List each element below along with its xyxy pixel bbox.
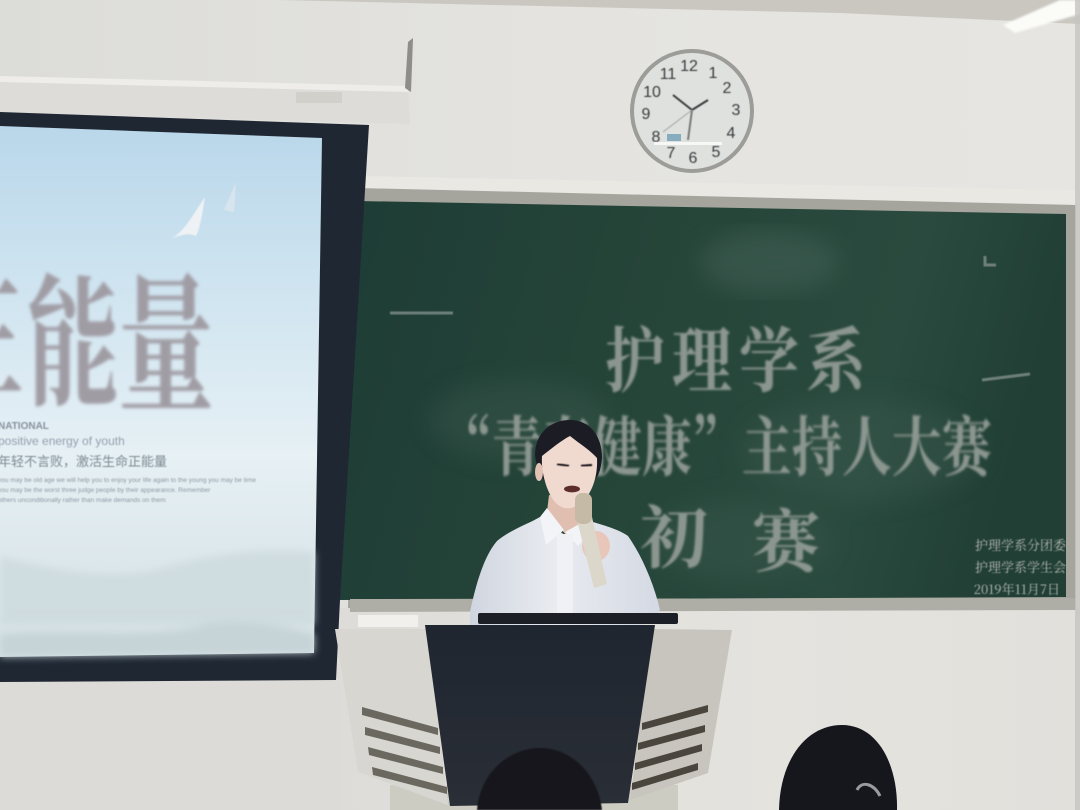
projector screen housing (0, 38, 413, 124)
clock numerals: 5 (712, 144, 721, 161)
neck (547, 495, 586, 535)
chalk signature: 护理学系分团委 (975, 535, 1066, 554)
chalkboard (338, 188, 1076, 612)
chalk signature: 2019年11月7日 (974, 579, 1060, 598)
chalk title line 3: 初 (640, 485, 708, 582)
eyes (557, 464, 592, 466)
podium base (390, 785, 678, 810)
clock numerals: 3 (732, 102, 741, 119)
chalk smudges (430, 380, 980, 580)
wall clock (630, 49, 754, 173)
slide text lines: you may be the worst three judge people by their appearance. Remember (0, 487, 211, 494)
lower wall (320, 608, 1080, 810)
placket (557, 534, 573, 616)
chalk title line 1: 护理学系 (605, 304, 873, 406)
board frame (348, 188, 1076, 610)
podium right wing (630, 629, 732, 800)
chalk title line 2: “青春健康”主持人大赛 (442, 395, 995, 489)
podium (335, 613, 732, 810)
hair clip (857, 784, 880, 796)
podium screen (425, 625, 655, 806)
chalk tray (350, 598, 1076, 612)
microphone (575, 493, 607, 588)
birds (172, 182, 236, 238)
board surface (338, 201, 1066, 600)
clock numerals: 7 (667, 145, 676, 162)
clock rim (630, 49, 754, 173)
chalk signature (974, 535, 1066, 598)
ceiling light (1003, 0, 1080, 33)
clock numerals: 12 (680, 58, 698, 75)
slide title: 能 (27, 231, 119, 436)
chalk haze (700, 230, 840, 294)
clock numerals: 10 (643, 84, 661, 101)
podium top bar (478, 613, 678, 624)
clock glass reflection (654, 134, 722, 145)
hair (535, 420, 602, 482)
slide text lines: others unconditionally rather than make demands on them (0, 497, 166, 504)
clock numerals: 11 (660, 66, 676, 83)
clock numerals: 8 (652, 129, 661, 146)
clock numerals: 2 (723, 80, 732, 97)
ear (535, 463, 543, 481)
items on ledge (358, 615, 418, 627)
clock numerals: 6 (689, 150, 698, 167)
clock face (634, 53, 750, 169)
screen frame (0, 112, 369, 682)
slide text lines: positive energy of youth (0, 434, 125, 448)
clock numerals: 9 (642, 106, 651, 123)
podium left wing (335, 629, 448, 805)
projected image (0, 126, 322, 657)
ceiling strip (280, 0, 1080, 24)
audience heads (477, 725, 897, 810)
projection screen (0, 112, 369, 682)
lower left wall (0, 680, 340, 810)
slide title: 量 (118, 227, 214, 441)
right wall edge (1075, 0, 1080, 810)
head right (779, 725, 897, 810)
chalk title line 3 (640, 485, 825, 586)
chalk title line 3: 赛 (752, 489, 825, 586)
mouth (564, 486, 580, 492)
collar (540, 508, 588, 546)
presenter (470, 420, 660, 628)
clock hands (663, 95, 708, 140)
slide text lines (0, 421, 256, 504)
slide text lines: 年轻不言败，激活生命正能量 (0, 454, 167, 469)
shirt (470, 517, 660, 628)
clock numerals: 1 (709, 65, 718, 82)
clock numerals: 4 (727, 125, 736, 142)
chalk signature: 护理学系学生会 (975, 557, 1066, 576)
slide text lines: you may be old age we will help you to enjoy your life again to the young you may be time (0, 477, 256, 484)
slide title (0, 227, 214, 441)
mountain haze (0, 551, 314, 657)
chalk marks (390, 256, 1030, 380)
podium vents (362, 705, 708, 794)
head left (477, 748, 602, 810)
wall ledge above chalkboard (358, 176, 1076, 204)
hand (582, 531, 610, 561)
face (542, 436, 597, 508)
clock numerals (642, 58, 741, 167)
